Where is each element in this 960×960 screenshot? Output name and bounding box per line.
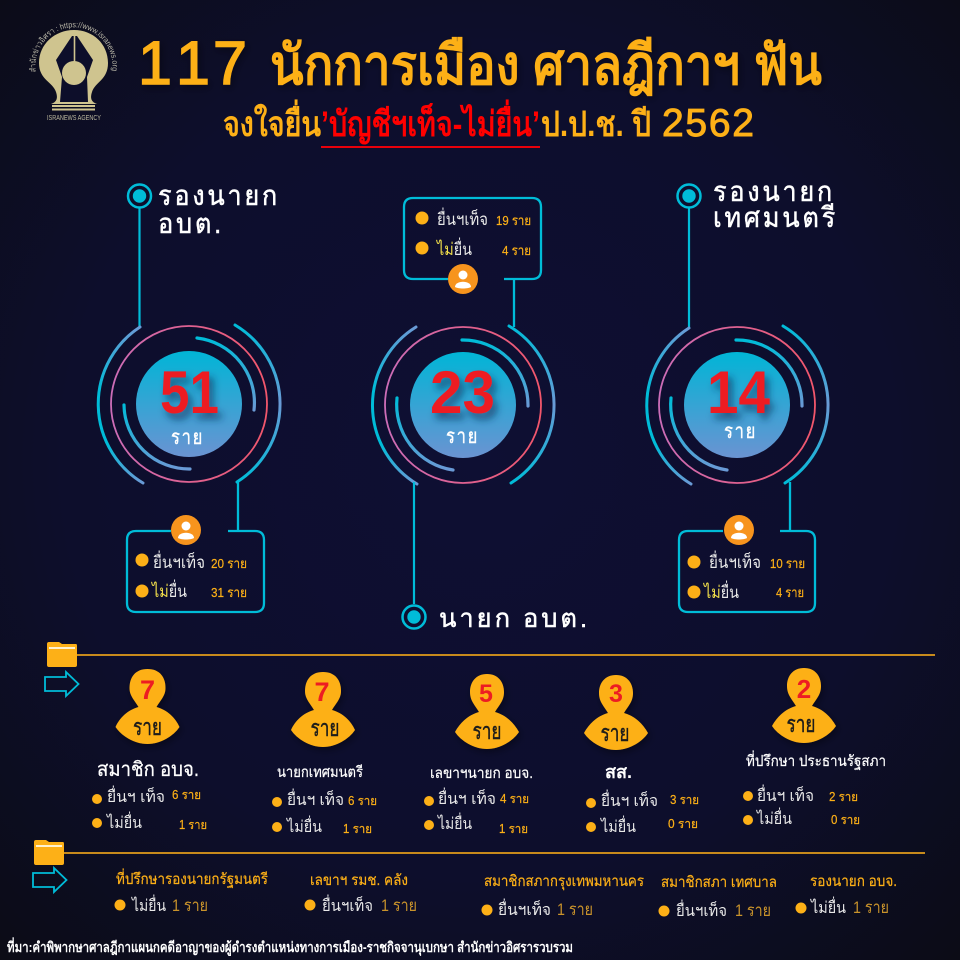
item: ที่ปรึกษารองนายกรัฐมนตรี <box>114 868 268 915</box>
item: สมาชิกสภา เทศบาล: 1 ราย <box>735 901 771 920</box>
panel: รองนายก เทศมนตรี 14 ราย <box>647 176 838 612</box>
person badge 2 <box>772 668 836 743</box>
source note: ที่มา:คำพิพากษาศาลฎีกาแผนกคดีอาญาของผู้ดำรงตำแหน่งทางการเมือง-ราชกิจจานุเบกษา สำนักข่าวอิศรารวบรวม <box>7 937 573 956</box>
group: นายกเทศมนตรี: นายกเทศมนตรี <box>277 764 363 781</box>
heading: รองนายก เทศมนตรี: รองนายก <box>713 176 835 207</box>
person badge 7 <box>116 669 180 744</box>
ring chart: 51: ราย <box>171 427 204 449</box>
item: ที่ปรึกษารองนายกรัฐมนตรี: ที่ปรึกษารองนายกรัฐมนตรี <box>116 868 268 888</box>
icon: person <box>448 264 478 294</box>
subtitle <box>223 99 754 148</box>
heading: รองนายก อบต.: รองนายก <box>158 180 280 211</box>
person badge 5 <box>455 674 519 749</box>
group: สส.: สส. <box>605 762 632 782</box>
item: เลขาฯ รมช. คลัง: 1 ราย <box>381 896 417 915</box>
icon: person <box>171 515 201 545</box>
group: สมาชิก อบจ.: 6 ราย <box>172 788 201 802</box>
heading: รองนายก เทศมนตรี: เทศมนตรี <box>713 202 838 233</box>
group: นายกเทศมนตรี <box>272 672 377 836</box>
person badge 5: ราย <box>472 718 502 744</box>
ring chart: 14: 14 <box>707 359 771 426</box>
ring chart: 14 <box>647 326 828 484</box>
item: สมาชิกสภา เทศบาล: ยื่นฯเท็จ <box>676 899 727 920</box>
item: รองนายก อบจ.: 1 ราย <box>853 898 889 917</box>
subtitle: 2562 <box>662 102 754 145</box>
item: สมาชิกสภากรุงเทพมหานคร: ยื่นฯเท็จ <box>498 898 551 919</box>
item: เลขาฯ รมช. คลัง: ยื่นฯเท็จ <box>322 894 373 915</box>
ring chart: 23 <box>372 326 554 484</box>
stat box: ไม่ยื่น <box>702 580 739 602</box>
ring chart: 14: ราย <box>724 421 757 443</box>
group: นายกเทศมนตรี: ไม่ยื่น <box>285 815 322 836</box>
item: เลขาฯ รมช. คลัง: เลขาฯ รมช. คลัง <box>310 872 408 889</box>
person badge 5: 5 <box>479 680 493 708</box>
group: ที่ปรึกษา ประธานรัฐสภา: ที่ปรึกษา ประธานรัฐสภา <box>746 750 886 770</box>
icon: arrow <box>45 672 78 696</box>
stat box: ยื่นฯเท็จ <box>709 550 761 572</box>
item: สมาชิกสภากรุงเทพมหานคร <box>482 873 644 919</box>
item: ที่ปรึกษารองนายกรัฐมนตรี: 1 ราย <box>172 896 208 915</box>
icon: arrow <box>33 868 66 892</box>
connector dot <box>678 184 700 328</box>
subtitle: ป.ป.ช. ปี <box>541 105 651 144</box>
logo: Isranews Agency: สำนักข่าวอิศรา : https://www.isranews.org <box>29 22 117 72</box>
group: สส.: ยื่นฯ เท็จ <box>601 789 658 810</box>
person badge 7: 7 <box>314 677 330 707</box>
stat box: ไม่ยื่น <box>435 237 472 259</box>
group: ที่ปรึกษา ประธานรัฐสภา: ไม่ยื่น <box>755 807 792 828</box>
ring chart: 23: 23 <box>430 359 495 426</box>
group: สมาชิก อบจ.: ยื่นฯ เท็จ <box>107 785 165 806</box>
item: สมาชิกสภากรุงเทพมหานคร: 1 ราย <box>557 900 593 919</box>
item: สมาชิกสภากรุงเทพมหานคร: สมาชิกสภากรุงเทพมหานคร <box>484 873 644 891</box>
title <box>138 29 822 97</box>
stat box: ยื่นฯเท็จ <box>437 207 488 229</box>
title: นักการเมือง ศาลฎีกาฯ ฟัน <box>270 34 822 96</box>
person badge 7 <box>291 672 355 747</box>
group: สส.: 0 ราย <box>668 817 698 831</box>
stat box: 4 ราย <box>776 585 804 600</box>
item: เลขาฯ รมช. คลัง <box>304 872 417 915</box>
group: เลขาฯนายก อบจ.: ยื่นฯ เท็จ <box>438 787 496 808</box>
person badge 3 <box>584 675 648 750</box>
heading: นายก อบต.: นายก อบต. <box>439 603 590 633</box>
subtitle: ’บัญชีฯเท็จ-ไม่ยื่น’ <box>321 99 540 145</box>
group: สส.: ไม่ยื่น <box>599 815 636 836</box>
group: สมาชิก อบจ.: สมาชิก อบจ. <box>97 759 199 781</box>
ring chart: 51: 51 <box>160 359 219 426</box>
stat box: ไม่ยื่น <box>150 579 187 601</box>
stat box <box>679 482 815 612</box>
person badge 7: 7 <box>140 675 155 705</box>
group: ที่ปรึกษา ประธานรัฐสภา: 2 ราย <box>829 790 858 804</box>
subtitle: จงใจยื่น <box>223 99 321 144</box>
person badge 7: ราย <box>133 714 162 740</box>
stat box <box>404 198 541 327</box>
group: นายกเทศมนตรี: 1 ราย <box>343 822 372 836</box>
item: สมาชิกสภา เทศบาล <box>658 874 777 920</box>
group: สมาชิก อบจ.: ไม่ยื่น <box>105 811 142 832</box>
group: นายกเทศมนตรี: ยื่นฯ เท็จ <box>287 788 344 809</box>
logo: Isranews Agency <box>29 22 117 122</box>
icon: folder <box>47 642 77 667</box>
group: ที่ปรึกษา ประธานรัฐสภา: 0 ราย <box>831 813 860 827</box>
heading: รองนายก อบต.: อบต. <box>158 208 224 239</box>
connector dot <box>128 184 151 328</box>
section divider with folder 2 <box>33 840 925 892</box>
group: สส.: 3 ราย <box>670 793 699 807</box>
person badge 3: ราย <box>600 720 630 746</box>
item: สมาชิกสภา เทศบาล: สมาชิกสภา เทศบาล <box>661 874 777 891</box>
icon: person <box>724 515 754 545</box>
item: รองนายก อบจ. <box>796 873 897 917</box>
title: 117 <box>138 29 247 97</box>
connector dot <box>402 482 426 628</box>
stat box: 4 ราย <box>502 243 531 258</box>
icon: folder <box>34 840 64 865</box>
person badge 2: 2 <box>797 674 811 704</box>
group: เลขาฯนายก อบจ.: 4 ราย <box>500 792 529 806</box>
person badge 2: ราย <box>786 711 816 737</box>
item: รองนายก อบจ.: รองนายก อบจ. <box>810 873 897 890</box>
group: เลขาฯนายก อบจ.: ไม่ยื่น <box>436 812 472 833</box>
logo: Isranews Agency: ISRANEWS AGENCY <box>47 113 101 122</box>
ring chart: 51 <box>98 325 280 483</box>
panel: นายก อบต. 23 ราย <box>372 198 590 633</box>
item: ที่ปรึกษารองนายกรัฐมนตรี: ไม่ยื่น <box>130 894 166 915</box>
group: นายกเทศมนตรี: 6 ราย <box>348 794 377 808</box>
stat box <box>127 482 264 612</box>
group: สส. <box>584 675 699 836</box>
group: เลขาฯนายก อบจ. <box>424 674 533 836</box>
item: รองนายก อบจ.: ไม่ยื่น <box>809 896 846 917</box>
section divider with folder 1 <box>45 642 935 696</box>
group: สมาชิก อบจ. <box>92 669 207 832</box>
heading: รองนายก อบต. <box>158 180 280 239</box>
group: สมาชิก อบจ.: 1 ราย <box>179 818 207 832</box>
group: ที่ปรึกษา ประธานรัฐสภา: ยื่นฯ เท็จ <box>757 784 814 805</box>
group: เลขาฯนายก อบจ.: 1 ราย <box>499 822 528 836</box>
person badge 3: 3 <box>609 680 623 708</box>
ring chart: 23: ราย <box>446 426 479 448</box>
panel: รองนายก อบต. 51 ราย <box>98 180 280 612</box>
group: เลขาฯนายก อบจ.: เลขาฯนายก อบจ. <box>430 765 533 782</box>
stat box: 10 ราย <box>770 556 805 571</box>
stat box: ยื่นฯเท็จ <box>153 550 205 572</box>
person badge 7: ราย <box>310 715 340 741</box>
stat box: 31 ราย <box>211 585 247 600</box>
stat box: 19 ราย <box>496 213 531 228</box>
group: ที่ปรึกษา ประธานรัฐสภา <box>743 668 886 828</box>
stat box: 20 ราย <box>211 556 247 571</box>
heading: รองนายก เทศมนตรี <box>713 176 838 233</box>
